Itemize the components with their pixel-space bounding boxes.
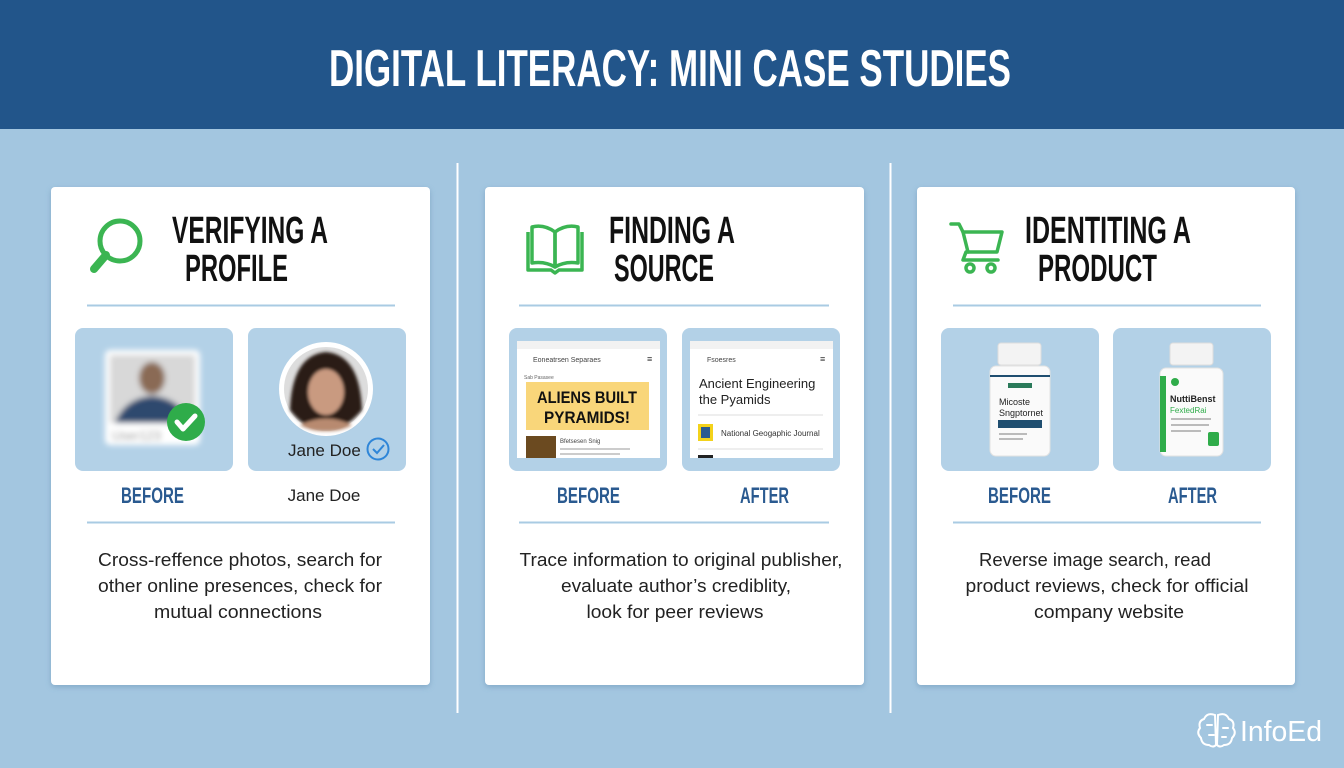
description: company website	[1034, 602, 1184, 622]
before image: generic supplement bottle: Sngptornet	[999, 408, 1044, 418]
description: look for peer reviews	[586, 602, 764, 622]
before image: blurred profile	[75, 328, 233, 471]
labels: AFTER	[740, 483, 789, 508]
after image: verified profile: Jane Doe	[288, 441, 361, 460]
labels: Jane Doe	[288, 486, 360, 505]
after image: official supplement bottle: FextedRai	[1170, 406, 1207, 415]
icon: green check	[167, 403, 205, 441]
after image: official supplement bottle: NuttiBenst	[1170, 394, 1216, 404]
after image: official supplement bottle	[1113, 328, 1271, 471]
description	[966, 550, 1248, 622]
after image: credible source page	[682, 328, 840, 471]
icon: magnifying glass	[94, 221, 140, 269]
logo: InfoEd: InfoEd	[1240, 716, 1322, 748]
description	[520, 550, 842, 622]
before image: generic supplement bottle: Micoste	[999, 397, 1030, 407]
heading: PROFILE	[185, 248, 288, 290]
logo: InfoEd	[1198, 714, 1322, 748]
heading: SOURCE	[614, 248, 714, 290]
before image: fake news page: ≡	[647, 354, 652, 364]
heading: IDENTITING A	[1025, 210, 1191, 252]
after image: verified profile	[248, 328, 406, 471]
before image: fake news page: ALIENS BUILT	[537, 388, 638, 407]
labels: BEFORE	[121, 483, 184, 508]
heading: VERIFYING A	[172, 210, 328, 252]
before image: blurred profile: User123	[112, 428, 161, 443]
labels: AFTER	[1168, 483, 1217, 508]
icon: brain	[1198, 714, 1235, 746]
description: Reverse image search, read	[979, 550, 1211, 570]
before image: fake news page	[509, 328, 667, 471]
description: mutual connections	[154, 602, 322, 622]
header banner	[0, 0, 1344, 129]
after image: credible source page: the Pyamids	[699, 392, 771, 407]
heading: PRODUCT	[1038, 248, 1157, 290]
description: evaluate author’s crediblity,	[561, 576, 791, 596]
heading	[1025, 210, 1191, 290]
description: Cross-reffence photos, search for	[98, 550, 382, 570]
icon: shopping cart	[951, 224, 1002, 272]
icon: open book	[528, 226, 582, 273]
labels	[557, 483, 789, 508]
description: product reviews, check for official	[966, 576, 1248, 596]
labels	[988, 483, 1217, 508]
before image: fake news page: Eoneatrsen Separaes	[533, 357, 601, 364]
labels: BEFORE	[988, 483, 1051, 508]
before image: fake news page: Sab Pasasee	[524, 375, 554, 381]
panel: finding a source	[485, 187, 864, 685]
labels: BEFORE	[557, 483, 620, 508]
after image: credible source page: Fsoesres	[707, 357, 736, 364]
heading: FINDING A	[609, 210, 735, 252]
after image: credible source page: National Geogaphic Journal	[721, 429, 820, 438]
description	[98, 550, 382, 622]
description: other online presences, check for	[98, 576, 382, 596]
heading	[172, 210, 328, 290]
panel: identifying a product	[917, 187, 1295, 685]
before image: fake news page: PYRAMIDS!	[544, 408, 630, 427]
labels	[121, 483, 360, 508]
after image: credible source page: Ancient Engineering	[699, 376, 815, 391]
description: Trace information to original publisher,	[520, 550, 842, 570]
panel: verifying a profile	[51, 187, 430, 685]
title: DIGITAL LITERACY: MINI CASE STUDIES	[329, 40, 1011, 98]
heading	[609, 210, 735, 290]
after image: credible source page: ≡	[820, 354, 825, 364]
before image: generic supplement bottle	[941, 328, 1099, 471]
before image: fake news page: Bfetsesen Snig	[560, 439, 600, 445]
